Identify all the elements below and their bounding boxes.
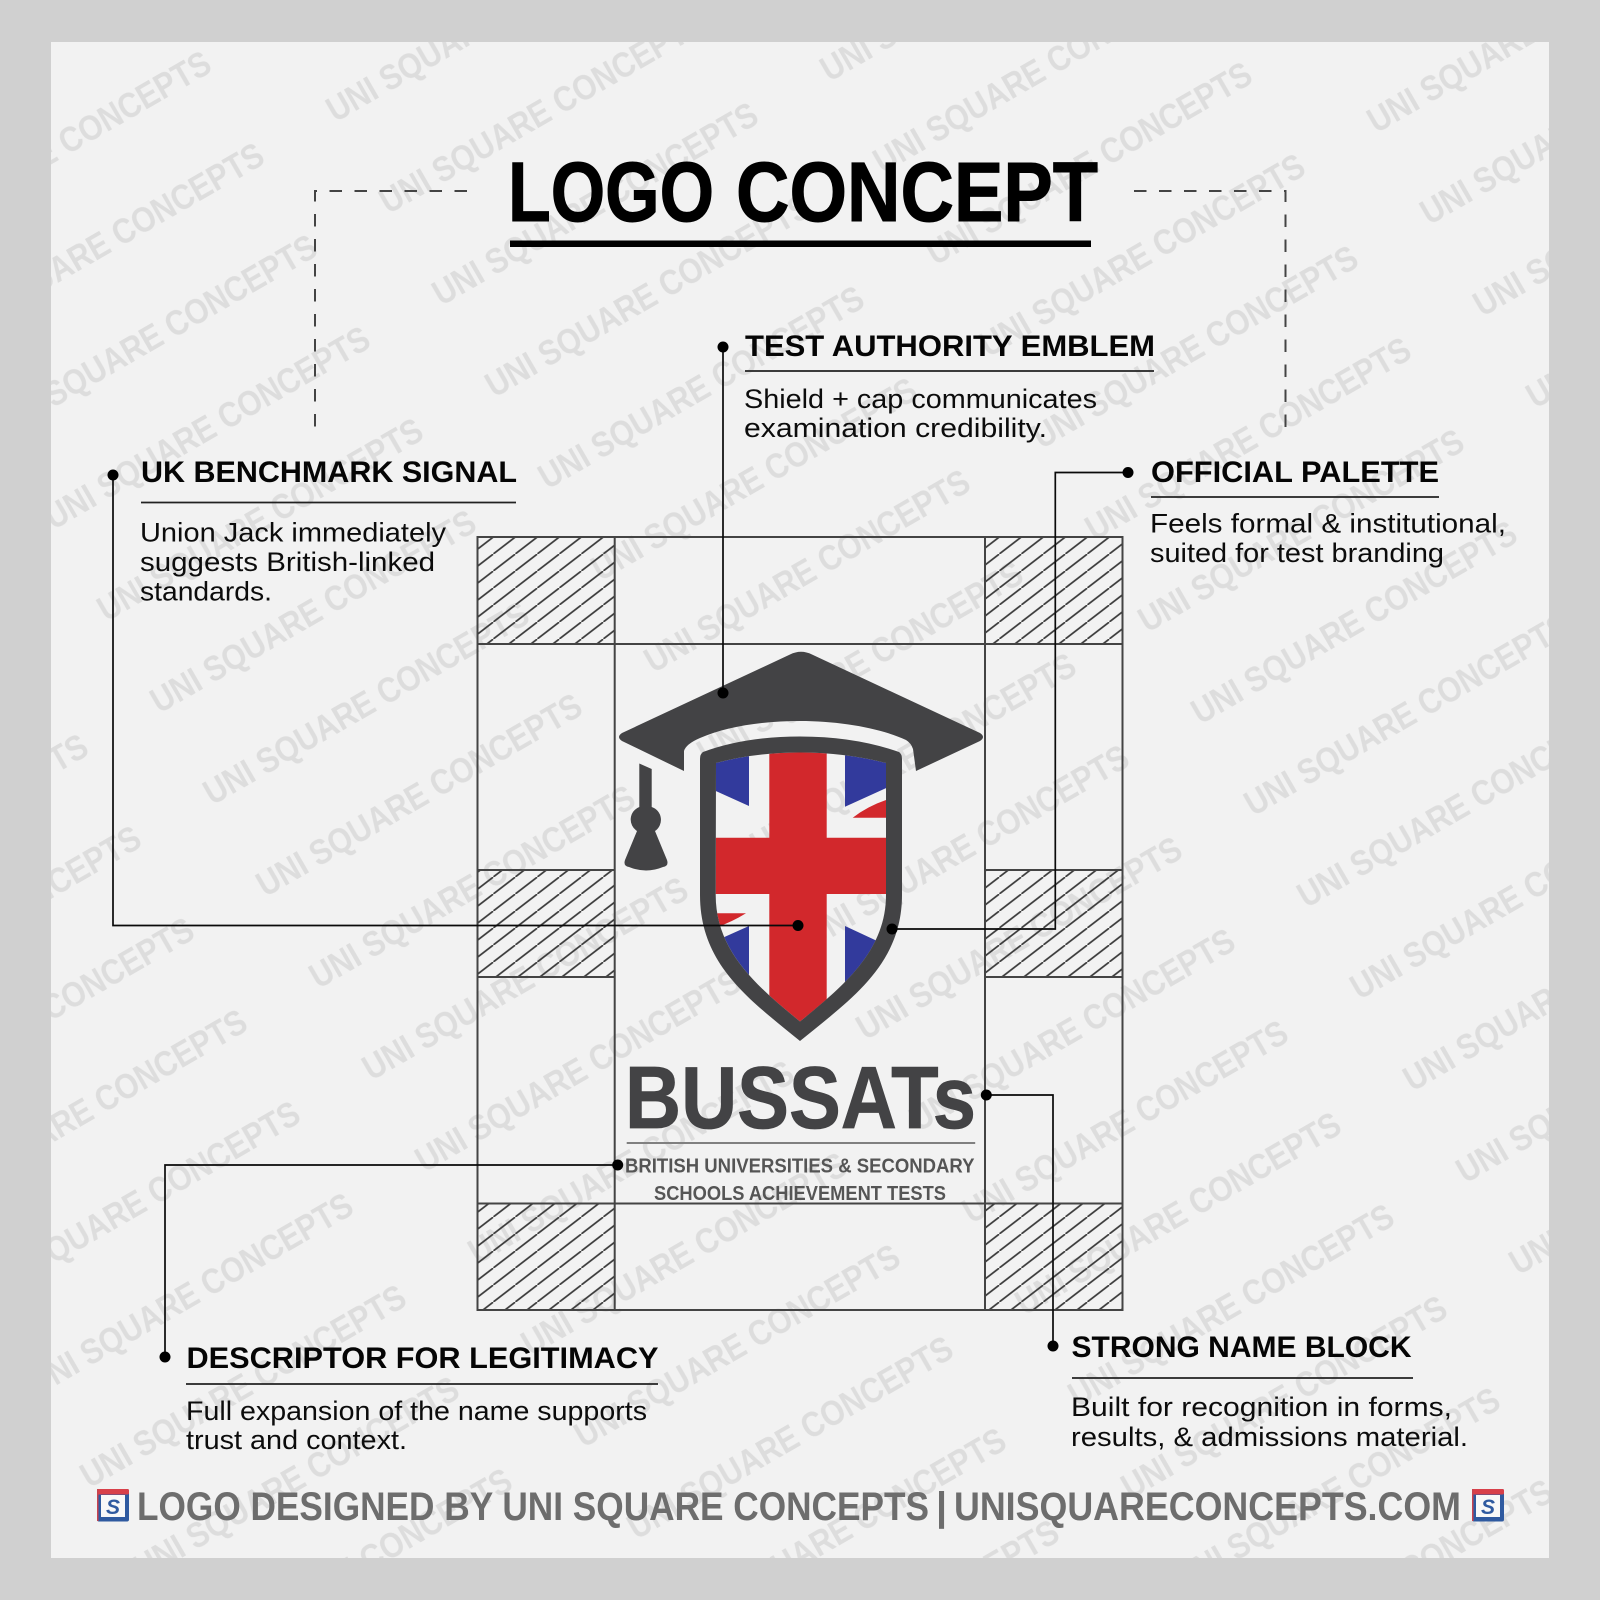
- footer credit: [97, 1485, 1504, 1529]
- body: suggests British-linked: [140, 547, 435, 577]
- body: [186, 1396, 647, 1455]
- body: [1071, 1392, 1468, 1452]
- body: [744, 384, 1097, 443]
- title: [508, 145, 1098, 247]
- footer text: LOGO DESIGNED BY UNI SQUARE CONCEPTS: [137, 1485, 929, 1529]
- icon: tassel: [624, 764, 668, 870]
- heading: UK BENCHMARK SIGNAL: [141, 456, 517, 489]
- callout: uk benchmark signal: [108, 456, 804, 931]
- icon: uni square logo right: [1472, 1489, 1504, 1522]
- icon: uni square logo left: [97, 1489, 129, 1522]
- heading: OFFICIAL PALETTE: [1151, 456, 1439, 489]
- footer text: |: [936, 1485, 947, 1529]
- logo: BUSSATs: [619, 652, 983, 1205]
- callout: official palette: [886, 456, 1506, 934]
- icon: shield frame: [700, 736, 902, 1041]
- body: [140, 518, 447, 607]
- construction grid: [478, 537, 1122, 1310]
- footer text: UNISQUARECONCEPTS.COM: [954, 1485, 1461, 1529]
- title: CONCEPT: [736, 145, 1098, 239]
- body: Shield + cap communicates: [744, 384, 1097, 414]
- body: trust and context.: [186, 1425, 407, 1455]
- body: Built for recognition in forms,: [1071, 1392, 1452, 1422]
- leader line: [892, 472, 1128, 929]
- icon: graduation cap: [619, 652, 983, 771]
- leader line: [722, 347, 724, 693]
- icon: uni square logo right: S: [1481, 1496, 1495, 1519]
- body: Feels formal & institutional,: [1150, 508, 1506, 538]
- logo wordmark: BUSSATs: [625, 1048, 976, 1147]
- leader line: [986, 1095, 1053, 1346]
- leader line: [113, 475, 798, 926]
- body: Union Jack immediately: [140, 518, 447, 548]
- logo descriptor: BRITISH UNIVERSITIES & SECONDARY: [625, 1155, 975, 1178]
- callout: descriptor for legitimacy: [160, 1160, 658, 1455]
- callout: test authority emblem: [718, 330, 1155, 698]
- callout: strong name block: [981, 1090, 1468, 1452]
- dashed bracket left: [315, 191, 467, 427]
- logo descriptor: SCHOOLS ACHIEVEMENT TESTS: [654, 1182, 946, 1205]
- body: standards.: [140, 577, 272, 607]
- leader line: [165, 1165, 618, 1357]
- heading: DESCRIPTOR FOR LEGITIMACY: [186, 1342, 658, 1375]
- body: results, & admissions material.: [1071, 1422, 1468, 1452]
- logo descriptor: [625, 1155, 975, 1205]
- body: [1150, 508, 1506, 568]
- footer text: [137, 1485, 1461, 1529]
- icon: uni square logo left: S: [106, 1496, 120, 1519]
- heading: TEST AUTHORITY EMBLEM: [745, 330, 1155, 363]
- dashed bracket right: [1134, 191, 1286, 427]
- icon: union jack flag: [716, 752, 886, 1022]
- body: examination credibility.: [744, 413, 1047, 443]
- body: Full expansion of the name supports: [186, 1396, 647, 1426]
- body: suited for test branding: [1150, 538, 1444, 568]
- title: LOGO: [508, 145, 714, 239]
- heading: STRONG NAME BLOCK: [1072, 1331, 1412, 1364]
